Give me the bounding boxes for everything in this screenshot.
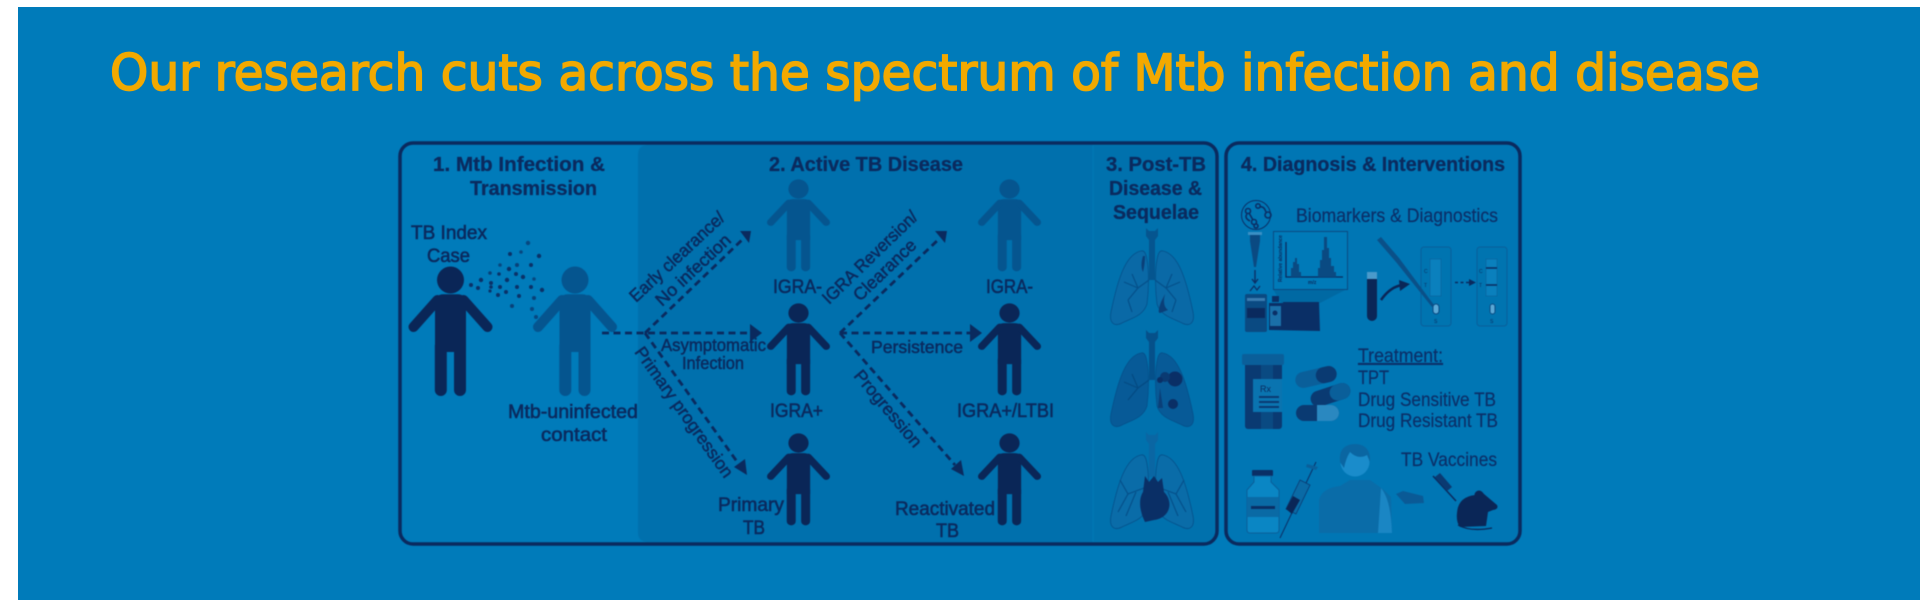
label: primary TB: Primary bbox=[718, 494, 784, 516]
label: progression: Progression bbox=[850, 366, 926, 451]
label: Mtb-uninfected contact bbox=[508, 401, 638, 446]
icon: LTBI person bbox=[982, 303, 1037, 391]
icon: lateral-flow test after: T bbox=[1479, 283, 1482, 289]
icon: lateral-flow test after bbox=[1477, 247, 1507, 326]
arrow: blood to test bbox=[1381, 280, 1410, 300]
heading: section 1: 1. Mtb Infection & bbox=[433, 154, 605, 176]
arrow: horizontal to persistence bbox=[840, 324, 982, 342]
label: early clearance / no infection: Early clearance/ bbox=[625, 207, 729, 306]
icon: swab bbox=[1377, 237, 1434, 307]
icon: lateral-flow test before: S bbox=[1434, 319, 1438, 325]
text block: treatment list: Treatment: bbox=[1358, 345, 1443, 367]
icon: lungs and heart bbox=[1111, 432, 1193, 529]
text block: treatment list: Drug Resistant TB bbox=[1358, 410, 1498, 432]
icon: lateral-flow test before: T bbox=[1424, 283, 1427, 289]
label: IGRA reversion / clearance: Clearance bbox=[849, 235, 920, 305]
icon: mouse bbox=[1457, 490, 1498, 529]
panel frame: stages 1 to 3 bbox=[400, 143, 1217, 544]
icon: vaccinated person bbox=[1319, 444, 1392, 533]
label: primary progression: Primary progression bbox=[631, 343, 738, 481]
panel: post-TB disease and sequelae bbox=[1106, 154, 1206, 529]
icon: mass spectrometer bbox=[1269, 296, 1320, 331]
icon: primary TB person bbox=[771, 433, 826, 521]
icon: reactivated TB person bbox=[982, 433, 1037, 521]
icon: IGRA-negative person, column two bbox=[982, 179, 1037, 267]
heading: section 1: Transmission bbox=[470, 178, 597, 200]
panel: active TB disease background bbox=[638, 145, 1093, 542]
icon: uninfected contact person bbox=[538, 266, 612, 390]
arrow: up to early clearance bbox=[645, 231, 751, 333]
label: TB index case: TB Index bbox=[411, 222, 487, 244]
icon: vaccine vial bbox=[1247, 470, 1279, 533]
icon: lungs with cavities bbox=[1111, 228, 1193, 325]
text block: treatment list bbox=[1358, 345, 1498, 432]
icon: pill bottle: Rx bbox=[1260, 384, 1271, 394]
label: primary TB bbox=[718, 494, 784, 539]
label: reactivated TB: Reactivated bbox=[895, 498, 995, 520]
label: TB index case: Case bbox=[427, 245, 470, 267]
icon: IGRA-negative person, column one bbox=[771, 179, 826, 267]
icon: mass spectrum chart: m/z bbox=[1308, 280, 1317, 286]
diagram bbox=[400, 143, 1520, 544]
icon: sample tube bbox=[1248, 232, 1262, 283]
heading: section 1 bbox=[433, 154, 605, 200]
label: asymptomatic infection bbox=[661, 335, 766, 373]
text block: treatment list: TPT bbox=[1358, 367, 1389, 389]
heading: section 3: Sequelae bbox=[1113, 202, 1199, 224]
icon: molecules in circle bbox=[1242, 200, 1271, 230]
label: primary TB: TB bbox=[743, 517, 765, 539]
icon: lateral-flow test after: C bbox=[1479, 269, 1483, 275]
heading: section 3: Disease & bbox=[1109, 178, 1202, 200]
label: Mtb-uninfected contact: contact bbox=[541, 424, 608, 446]
icon: infectious aerosol droplets bbox=[469, 241, 544, 319]
label: persistence: Persistence bbox=[871, 337, 963, 357]
icon: mass spectrum chart: Relative abundance bbox=[1278, 235, 1284, 282]
icon: lateral-flow test before: C bbox=[1424, 269, 1428, 275]
icon: pill bottle bbox=[1242, 354, 1284, 429]
icon: mass spectrum chart bbox=[1273, 232, 1348, 303]
label: biomarkers and diagnostics: Biomarkers & Diagnostics bbox=[1296, 205, 1498, 227]
label: early clearance / no infection: No infection bbox=[651, 230, 735, 310]
arrow: down to primary TB bbox=[645, 333, 747, 475]
heading: section 2: 2. Active TB Disease bbox=[769, 154, 963, 176]
arrow: horizontal to asymptomatic infection bbox=[602, 324, 762, 342]
heading: section 3 bbox=[1106, 154, 1206, 224]
panel frame: diagnosis and interventions bbox=[1226, 143, 1520, 544]
icon: syringe bbox=[1280, 462, 1318, 538]
panel: Mtb infection and transmission bbox=[411, 154, 638, 446]
label: TB vaccines: TB Vaccines bbox=[1401, 449, 1497, 471]
label: IGRA+ column one: IGRA+ bbox=[770, 400, 823, 422]
icon: IGRA-positive person, column one bbox=[771, 303, 826, 391]
label: reactivated TB: TB bbox=[936, 520, 959, 542]
label: IGRA+/LTBI: IGRA+/LTBI bbox=[957, 400, 1054, 422]
icon: index case person bbox=[414, 266, 488, 390]
arrow: up to IGRA reversion bbox=[840, 231, 947, 333]
arrow: down to reactivated TB bbox=[840, 333, 964, 476]
icon: blood tube bbox=[1367, 272, 1377, 321]
icon: capsules bbox=[1294, 364, 1352, 421]
label: asymptomatic infection: Asymptomatic bbox=[661, 335, 766, 355]
heading: section 4: 4. Diagnosis & Interventions bbox=[1241, 154, 1505, 176]
label: IGRA reversion / clearance: IGRA Reversion/ bbox=[818, 207, 922, 308]
arrow: test result dotted bbox=[1455, 279, 1476, 286]
panel: active TB disease bbox=[602, 154, 1054, 542]
icon: lateral-flow test before bbox=[1421, 247, 1451, 326]
icon: lateral-flow test after: S bbox=[1490, 319, 1494, 325]
label: IGRA- column two: IGRA- bbox=[986, 276, 1033, 298]
label: IGRA- column one: IGRA- bbox=[773, 276, 822, 298]
heading: section 3: 3. Post-TB bbox=[1106, 154, 1206, 176]
icon: chromatography stack bbox=[1245, 286, 1267, 332]
label: Mtb-uninfected contact: Mtb-uninfected bbox=[508, 401, 638, 423]
panel: post-TB background bbox=[1093, 145, 1215, 542]
icon: gloved hand with needle bbox=[1396, 491, 1424, 504]
icon: lungs with lesions bbox=[1111, 330, 1193, 427]
label: asymptomatic infection: Infection bbox=[682, 353, 744, 373]
label: reactivated TB bbox=[895, 498, 995, 542]
text block: treatment list: Drug Sensitive TB bbox=[1358, 389, 1496, 411]
label: TB index case bbox=[411, 222, 487, 267]
panel: diagnosis and interventions bbox=[1241, 154, 1507, 538]
title: Our research cuts across the spectrum of Mtb infection and disease bbox=[110, 44, 1760, 102]
icon: small syringe bbox=[1433, 473, 1456, 501]
